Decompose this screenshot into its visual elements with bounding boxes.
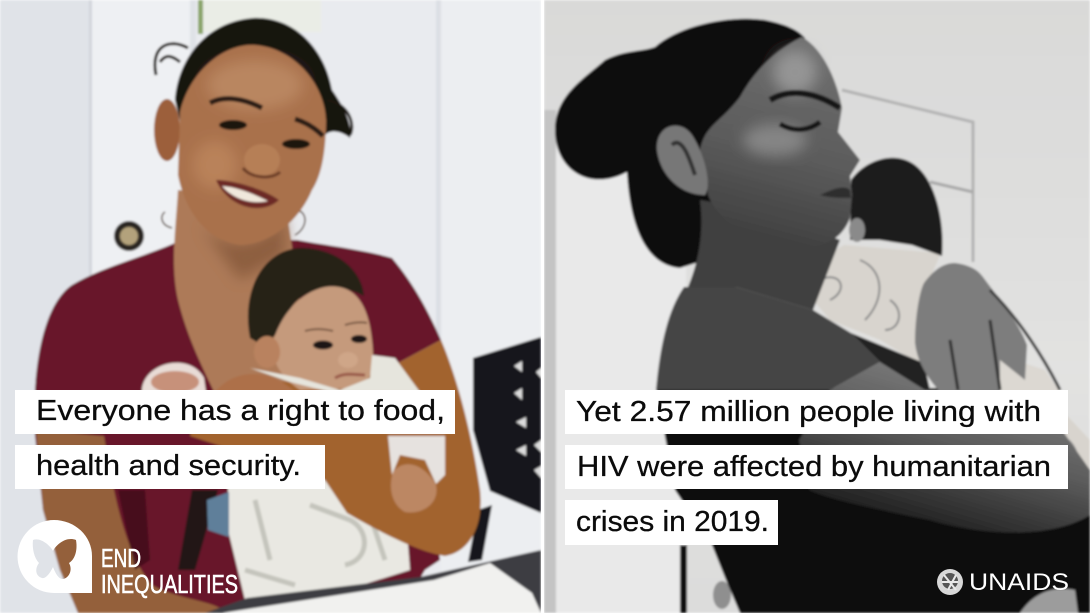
nose	[244, 144, 280, 176]
desk	[205, 550, 541, 613]
caption line 3: crises in 2019.	[576, 506, 769, 538]
back of arm line	[990, 290, 1060, 390]
brow and eye	[770, 93, 840, 108]
panel: colour photo of mother and baby	[0, 0, 541, 613]
icon: UN emblem	[937, 569, 963, 595]
baby's clothing	[226, 478, 412, 600]
eyes and brows	[210, 99, 262, 108]
garment under hand	[999, 361, 1058, 390]
UNAIDS wordmark: UNAIDS	[969, 569, 1069, 596]
baby's right cuff and fist	[388, 436, 445, 484]
logo: End Inequalities	[18, 520, 238, 599]
caption line 1	[15, 390, 455, 434]
logo wordmark	[101, 543, 238, 599]
baby's left hand and sleeve	[142, 363, 206, 392]
smile	[216, 180, 279, 208]
caption line 1	[565, 390, 1068, 434]
forearm	[799, 362, 1090, 532]
baby's garment	[813, 245, 1090, 487]
jewellery badge and strap	[178, 490, 218, 570]
logo: UNAIDS	[937, 569, 1069, 596]
woman's hand on baby	[217, 374, 294, 390]
baby's head	[850, 158, 943, 256]
caption line 1: Yet 2.57 million people living with	[576, 396, 1041, 428]
caption line 2	[565, 445, 1068, 489]
hair wisps	[155, 44, 352, 135]
face	[700, 37, 860, 247]
hand	[915, 263, 1027, 392]
baby's face	[272, 286, 373, 390]
caption line 2: health and security.	[36, 450, 301, 482]
sleeve	[656, 287, 880, 390]
caption line 2	[15, 445, 325, 489]
shirt shadow beside sleeve	[851, 333, 930, 390]
paper on the desk	[222, 563, 541, 613]
neck shadow	[200, 215, 285, 280]
divider gutter	[541, 0, 544, 613]
caption line 2: HIV were affected by humanitarian	[577, 451, 1051, 483]
caption line 3	[565, 500, 778, 545]
caption line 1: Everyone has a right to food,	[36, 395, 445, 427]
woman's left arm	[36, 430, 220, 613]
text block: right caption	[565, 390, 1068, 545]
ear	[154, 99, 180, 161]
lips	[820, 188, 851, 198]
ear	[657, 126, 708, 195]
face	[178, 45, 326, 245]
baby's hair	[248, 248, 364, 345]
logo wordmark: END	[101, 543, 141, 573]
baby's collar	[250, 355, 420, 392]
text block: left caption	[15, 390, 455, 489]
hair back	[175, 18, 350, 138]
black shirt lower body	[656, 388, 1090, 613]
neck and chest	[174, 190, 300, 395]
woman's maroon shirt	[35, 240, 441, 613]
logo wordmark: INEQUALITIES	[101, 569, 238, 599]
neck	[688, 200, 840, 310]
lower-right garment	[1020, 589, 1078, 613]
hair and bun	[555, 19, 805, 268]
icon: butterfly badge	[18, 520, 92, 593]
panel: black-and-white photo of mother holding baby	[544, 0, 1090, 613]
woman's right arm	[190, 340, 481, 556]
